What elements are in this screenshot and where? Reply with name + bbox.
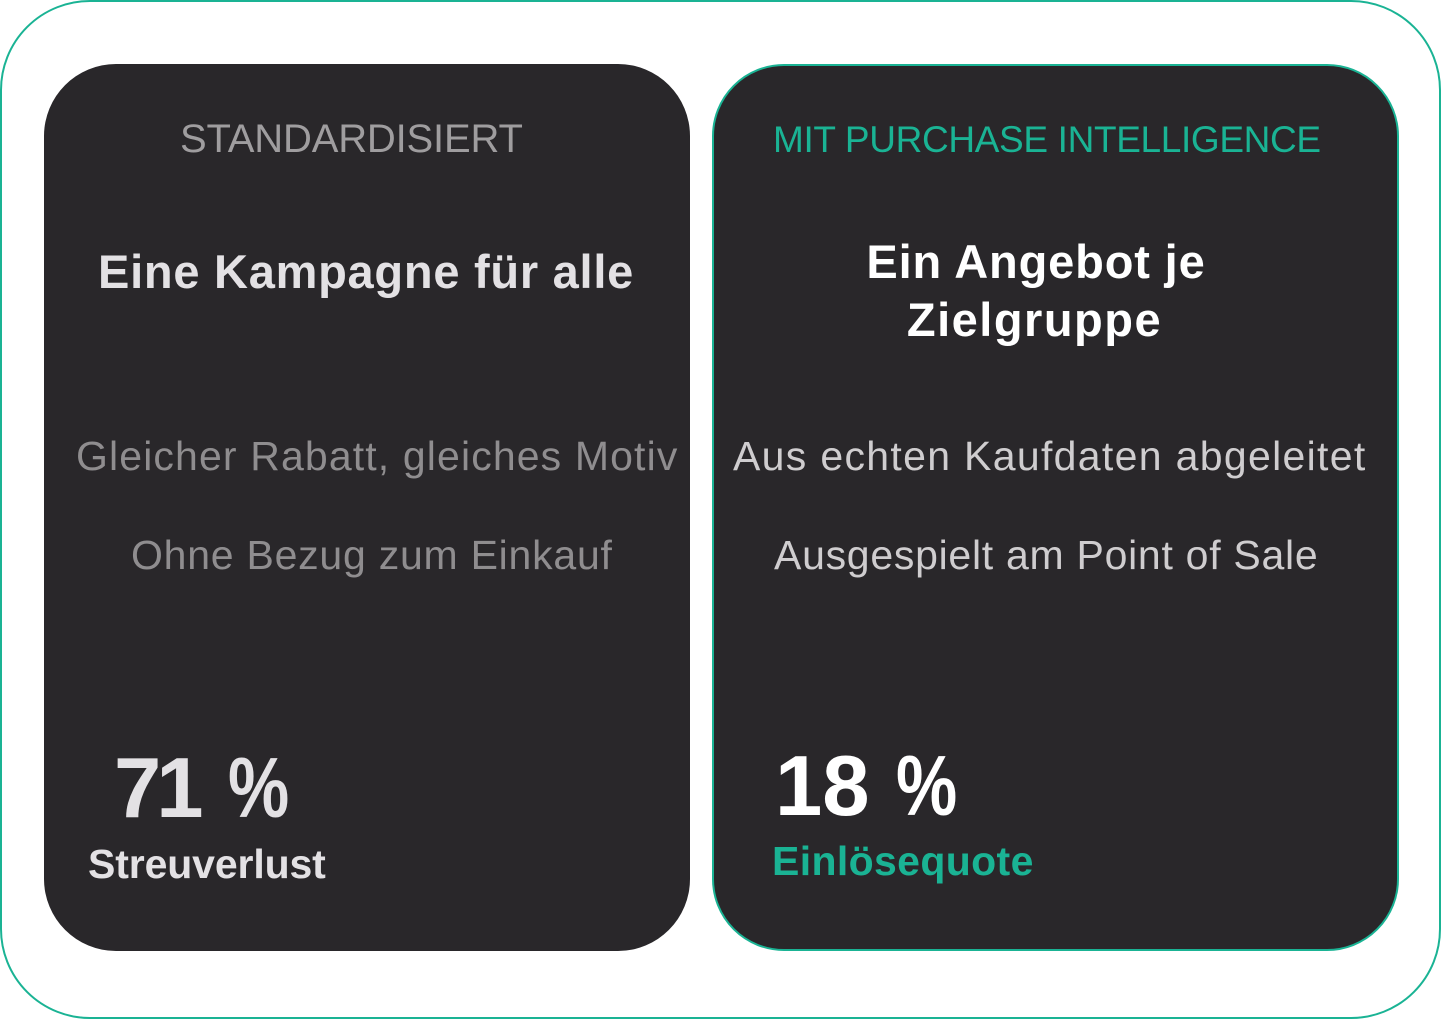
panel: mit purchase intelligence: % (896, 739, 957, 834)
stat label: Streuverlust: Streuverlust (88, 841, 326, 887)
heading: ein Angebot je Zielgruppe (866, 235, 1206, 346)
panel: standardisiert (44, 64, 690, 951)
label: standardisiert: STANDARDISIERT (180, 117, 523, 161)
stat: 18 %: 18 (775, 739, 870, 834)
heading: eine Kampagne: Eine Kampagne für alle (98, 245, 634, 298)
panel: standardisiert: % (228, 741, 289, 836)
text: ausgespielt: Ausgespielt am Point of Sale (774, 532, 1318, 578)
heading: ein Angebot je Zielgruppe: Ein Angebot je (866, 235, 1206, 288)
text: ohne Bezug: Ohne Bezug zum Einkauf (131, 532, 613, 578)
text: aus echten Kaufdaten: Aus echten Kaufdaten abgeleitet (733, 433, 1367, 479)
stat: 71 %: 71 (114, 741, 199, 836)
label: mit purchase intelligence: MIT PURCHASE INTELLIGENCE (773, 119, 1321, 160)
stat label: Einlösequote: Einlösequote (772, 838, 1034, 884)
heading: ein Angebot je Zielgruppe: Zielgruppe (907, 293, 1162, 346)
stat: 71 % (114, 741, 289, 836)
panel: mit purchase intelligence (712, 64, 1399, 951)
stat: 18 % (775, 739, 957, 834)
text: gleicher Rabatt: Gleicher Rabatt, gleiches Motiv (76, 433, 678, 479)
